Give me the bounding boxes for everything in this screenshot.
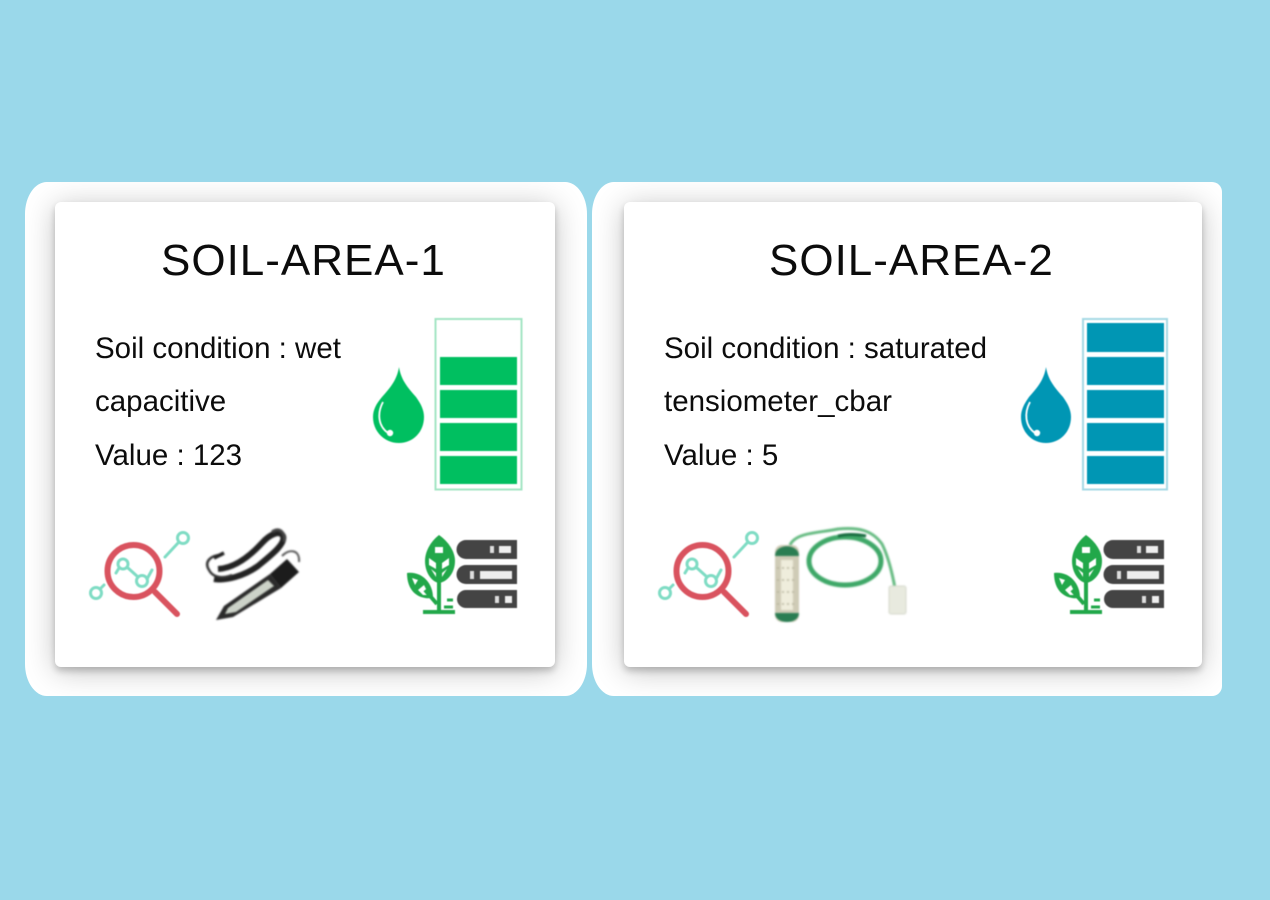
panel: soil area 2 halo and card [592,182,1222,696]
title: soil area 2: SOIL-AREA-2 [769,236,1054,285]
icon: magnifier with chart, area 2 [660,532,758,614]
icon: plant and servers, area 1 [407,535,517,612]
title: soil area 1: SOIL-AREA-1 [161,236,446,285]
icon: green water drop [373,367,424,443]
text: soil area 1 sensor type: capacitive [95,385,226,418]
icon: magnifier with chart, area 1 [90,532,188,614]
text: soil area 2 sensor type: tensiometer_cbar [664,385,892,418]
gauge: soil area 2 moisture level [1083,319,1167,490]
icon: blue water drop [1021,367,1071,443]
panel: soil area 1 halo and card [25,182,587,696]
icon: plant and servers, area 2 [1054,535,1164,612]
icon: tensiometer sensor [775,528,906,622]
gauge: soil area 1 moisture level [436,319,522,490]
text: soil area 1 value: Value : 123 [95,439,242,472]
icon: capacitive soil sensor [207,530,299,620]
text: soil area 1 condition: Soil condition : wet [95,332,341,365]
text: soil area 2 value: Value : 5 [664,439,778,472]
text: soil area 2 condition: Soil condition : saturated [664,332,987,365]
